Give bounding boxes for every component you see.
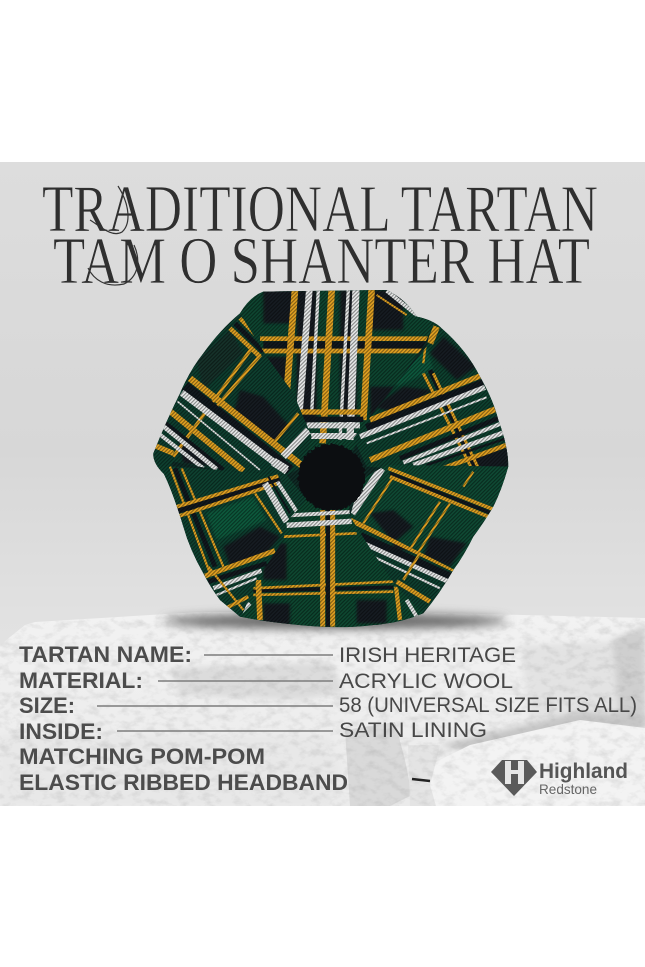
hat panel: top (240, 290, 432, 450)
hat panel: left lower (157, 463, 307, 623)
title (42, 172, 598, 298)
logo: Highland Redstone: Redstone (539, 781, 597, 797)
pom-pom (298, 444, 365, 511)
specifications: left labels: SIZE: (19, 693, 75, 718)
specifications: values: 58 (UNIVERSAL SIZE FITS ALL) (339, 693, 637, 717)
leader lines (97, 655, 333, 731)
hat panel: bottom (238, 497, 424, 628)
hat shadow (163, 613, 507, 629)
specifications: left labels (19, 642, 348, 795)
specifications: values: IRISH HERITAGE (339, 643, 516, 667)
specifications: values: SATIN LINING (339, 718, 487, 742)
specifications: values (339, 643, 637, 742)
hat panel: fold lower right (350, 517, 454, 614)
background panel (0, 162, 645, 806)
rock plinth (0, 610, 645, 806)
hat panel: upper left (153, 314, 312, 478)
specifications: left labels: INSIDE: (19, 719, 103, 744)
specifications: values: ACRYLIC WOOL (339, 669, 513, 693)
specifications: left labels: ELASTIC RIBBED HEADBAND (19, 770, 348, 795)
tartan hat (153, 290, 508, 628)
specifications: left labels: MATCHING POM-POM (19, 744, 265, 769)
specifications: left labels: MATERIAL: (19, 668, 143, 693)
hat panel: right lower (350, 465, 508, 574)
logo: Highland Redstone: Highland (539, 760, 628, 783)
fabric twill texture (140, 280, 520, 630)
hat panel: upper right (353, 322, 508, 468)
logo: Highland Redstone (491, 760, 628, 797)
specifications: left labels: TARTAN NAME: (19, 642, 192, 667)
